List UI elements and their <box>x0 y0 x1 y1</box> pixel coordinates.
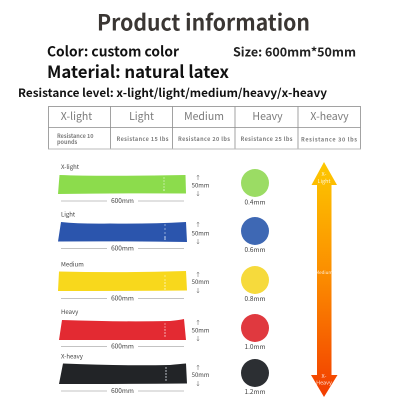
band row: medium: 50mm <box>192 277 210 286</box>
band row: x-light <box>58 162 210 205</box>
band row: heavy <box>59 307 210 350</box>
thickness swatch: 1.0mm: 1.0mm <box>244 341 266 351</box>
resistance arrow: Medium <box>315 269 333 276</box>
resistance table: pounds <box>57 138 78 146</box>
thickness swatch: 0.4mm: 0.4mm <box>244 196 266 206</box>
text: material: Material: natural latex <box>47 58 229 83</box>
resistance table: Heavy <box>252 109 283 124</box>
resistance table: Resistance 25 lbs <box>240 135 293 143</box>
band row: x-heavy: 50mm <box>192 370 210 379</box>
resistance table: X-light <box>61 109 92 124</box>
resistance table: Resistance 30 lbs <box>301 136 357 144</box>
text: size: Size: 600mm*50mm <box>233 42 356 60</box>
resistance table <box>48 106 360 149</box>
title: Product information <box>97 6 310 38</box>
band row: x-heavy <box>59 352 210 395</box>
thickness swatch: 0.6mm: 0.6mm <box>244 244 266 254</box>
resistance table: Resistance 20 lbs <box>178 135 230 143</box>
thickness swatch: 0.4mm <box>241 169 269 206</box>
resistance table: X-heavy <box>310 109 349 124</box>
resistance arrow: X- <box>322 170 327 178</box>
band row: heavy: 50mm <box>192 326 210 334</box>
band row: x-light: 600mm <box>111 195 134 205</box>
text: color: Color: custom color <box>47 42 180 62</box>
thickness swatch: 1.2mm <box>241 359 269 396</box>
band row: x-light: X-light <box>61 162 80 171</box>
text: resistance level: Resistance level: x-light/light/medium/heavy/x-heavy <box>18 85 327 101</box>
thickness swatch: 1.0mm <box>241 314 269 351</box>
band row: heavy: Heavy <box>61 307 79 316</box>
resistance arrow: Light <box>317 177 331 185</box>
band row: x-heavy: X-heavy <box>61 352 84 360</box>
thickness swatch: 0.6mm <box>241 217 269 254</box>
band row: medium <box>58 260 210 302</box>
resistance table: Resistance 10 <box>57 132 94 140</box>
band row: x-light: 50mm <box>192 180 210 190</box>
resistance arrow: Heavy <box>316 378 332 386</box>
resistance arrow: X- <box>322 372 327 380</box>
band row: x-heavy: 600mm <box>111 385 134 395</box>
thickness swatch: 0.8mm <box>241 266 269 303</box>
band row: light: 600mm <box>111 242 134 252</box>
thickness swatch: 0.8mm: 0.8mm <box>244 293 266 303</box>
thickness swatch: 1.2mm: 1.2mm <box>244 386 266 396</box>
band row: light: Light <box>61 210 76 218</box>
resistance table: Medium <box>184 109 224 124</box>
resistance table: Resistance 15 lbs <box>116 135 169 143</box>
band row: light <box>58 210 210 252</box>
band row: heavy: 600mm <box>111 340 134 350</box>
band row: medium: 600mm <box>111 292 134 302</box>
band row: light: 50mm <box>192 228 210 238</box>
band row: medium: Medium <box>61 260 84 268</box>
resistance table: Light <box>129 109 154 124</box>
resistance arrow <box>311 162 338 397</box>
